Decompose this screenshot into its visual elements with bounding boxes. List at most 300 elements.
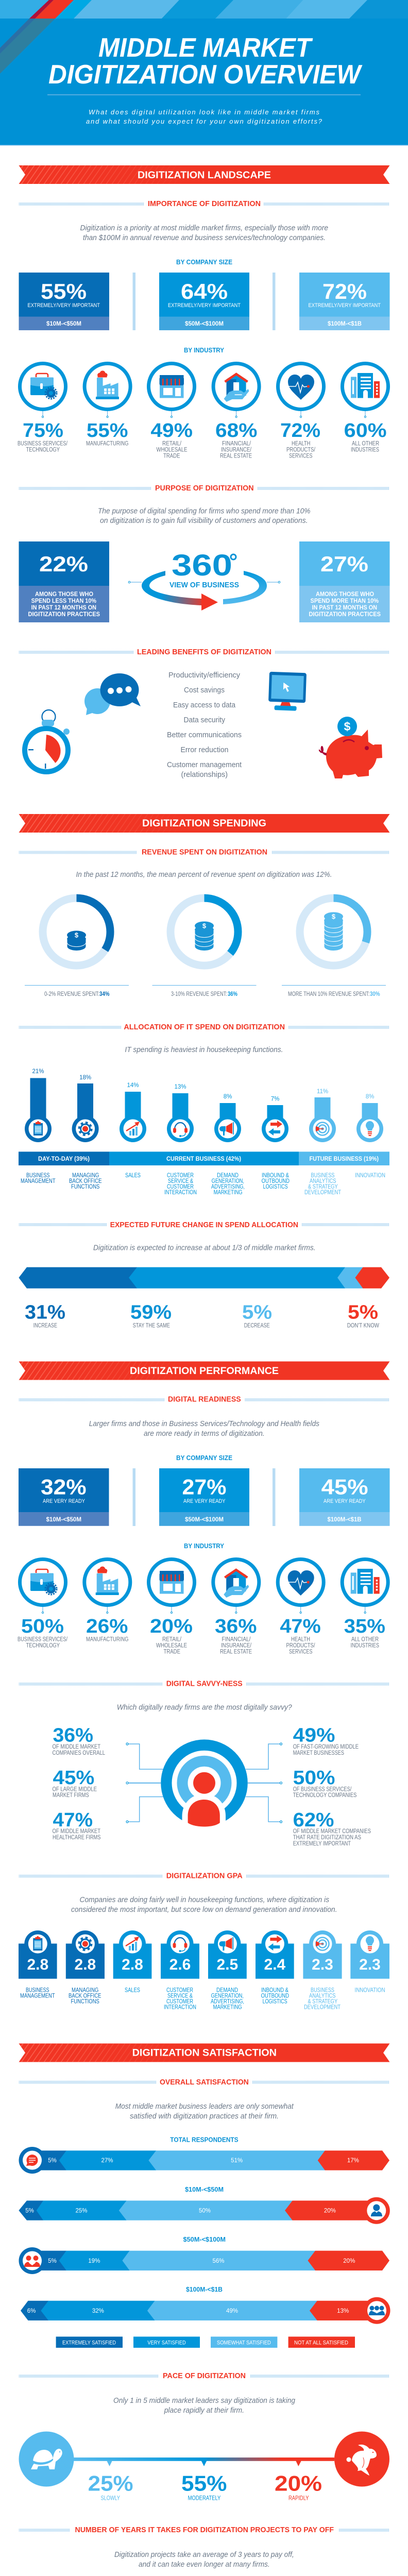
category labels: SALES (125, 1173, 141, 1179)
subheading: overall satisfaction (19, 2078, 389, 2087)
banner: digitization satisfaction: DIGITIZATION SATISFACTION (132, 2048, 277, 2059)
stats: readiness by industry: TECHNOLOGY (26, 1642, 60, 1649)
diagram: 360 degree view of business (128, 549, 280, 611)
subheading: digital savvy-ness: DIGITAL SAVVY-NESS (166, 1680, 243, 1688)
chevron bar: future change (19, 1267, 389, 1289)
banner: digitization spending (19, 814, 389, 833)
stats: readiness by industry: RETAIL/ (162, 1636, 182, 1642)
stats: readiness by industry: 20% (150, 1616, 193, 1637)
captions: revenue spent: 3-10% REVENUE SPENT: (171, 991, 227, 997)
paragraph: GPA (71, 1895, 337, 1914)
donut chart: 3-10% (171, 898, 238, 965)
GPA labels: ANALYTICS (309, 1993, 336, 1999)
category labels: LOGISTICS (263, 1184, 288, 1190)
stats: savvy right: OF FAST-GROWING MIDDLE (293, 1744, 359, 1750)
chart: $100M-<$1B: 32% (92, 2308, 104, 2314)
stats: importance by industry: INSURANCE/ (221, 447, 252, 453)
stats: savvy right: EXTREMELY IMPORTANT (293, 1841, 351, 1847)
stats: future change: STAY THE SAME (133, 1323, 170, 1329)
subtitle: What does digital utilization look like in middle market firms (89, 108, 320, 116)
stats: readiness by industry: ALL OTHER (351, 1636, 379, 1642)
subheading: revenue spent (19, 848, 389, 857)
chart: total respondents: 17% (347, 2158, 359, 2164)
GPA labels: OUTBOUND (261, 1993, 289, 1999)
stats: importance by industry: MANUFACTURING (86, 441, 129, 447)
paragraph: GPA: Companies are doing fairly well in housekeeping functions, where digitization is (79, 1895, 329, 1904)
cards: GPA scores: 2.8 (75, 1956, 96, 1973)
captions: revenue spent: 34% (99, 991, 110, 997)
GPA labels: DEMAND (216, 1987, 238, 1993)
subheading: pace of digitization (19, 2371, 389, 2380)
captions: revenue spent (25, 985, 386, 997)
paragraph: pace: Only 1 in 5 middle market leaders say digitization is taking (113, 2396, 296, 2405)
category labels: MANAGEMENT (21, 1178, 56, 1184)
cards: GPA scores: 2.3 (359, 1956, 381, 1973)
category strip (19, 1151, 389, 1165)
paragraph: purpose: on digitization is to gain full visibility of customers and operations. (100, 516, 308, 525)
stats: savvy left: OF LARGE MIDDLE (53, 1786, 97, 1792)
stats: readiness by industry: FINANCIAL/ (222, 1636, 251, 1642)
subtitle (86, 108, 322, 125)
legend: satisfaction: SOMEWHAT SATISFIED (217, 2340, 271, 2346)
stats: savvy left: 47% (53, 1809, 93, 1831)
banner: digitization performance (19, 1361, 389, 1380)
subheading: digitalization GPA: DIGITALIZATION GPA (166, 1872, 243, 1880)
GPA labels: MANAGEMENT (20, 1993, 55, 1999)
title: MIDDLE MARKET (98, 33, 313, 63)
cards: readiness by company size (19, 1468, 389, 1526)
paragraph: importance (80, 224, 328, 242)
cards: readiness by company size: $50M-<$100M (185, 1516, 224, 1523)
captions: revenue spent: MORE THAN 10% REVENUE SPENT: (288, 991, 370, 997)
captions: revenue spent: 30% (370, 991, 380, 997)
subheading: digital readiness: DIGITAL READINESS (168, 1395, 241, 1404)
paragraph: pace: place rapidly at their firm. (164, 2406, 244, 2415)
subheading: importance of digitization (19, 199, 389, 208)
GPA labels: BUSINESS (26, 1987, 49, 1993)
GPA labels: DEVELOPMENT (304, 2004, 341, 2010)
subtitle: and what should you expect for your own digitization efforts? (86, 117, 322, 125)
chart: $100M-<$1B: 13% (337, 2308, 349, 2314)
category labels: SERVICE & (168, 1178, 193, 1184)
subheading: expected future change (19, 1221, 389, 1229)
stats: importance by industry: TECHNOLOGY (26, 447, 60, 453)
stats: savvy right: THAT RATE DIGITIZATION AS (293, 1835, 361, 1841)
paragraph: revenue: In the past 12 months, the mean percent of revenue spent on digitization was 12%. (76, 870, 332, 879)
card: 27%: AMONG THOSE WHO (316, 590, 374, 598)
stats: savvy left: MARKET FIRMS (53, 1792, 89, 1799)
category strip: DAY-TO-DAY (39%) (38, 1155, 90, 1162)
icons: readiness by industry (20, 1559, 388, 1614)
stats: importance by industry: 68% (215, 420, 258, 442)
stats: readiness by industry: INSURANCE/ (221, 1642, 252, 1649)
stats: pace: RAPIDLY (288, 2496, 309, 2502)
icon: piggy bank: $ (344, 720, 351, 733)
stats: savvy left: OF MIDDLE MARKET (53, 1744, 100, 1750)
stats: pace: 25% (88, 2471, 133, 2496)
category labels: FUNCTIONS (71, 1184, 100, 1190)
list: benefits: Easy access to data (173, 701, 236, 709)
category labels: BACK OFFICE (69, 1178, 102, 1184)
stats: importance by industry: BUSINESS SERVICES/ (18, 441, 68, 447)
chart: $50M-<$100M: 56% (212, 2258, 225, 2264)
list: benefits: Data security (183, 716, 225, 724)
list: benefits: Better communications (167, 731, 242, 739)
heading: by company size: BY COMPANY SIZE (176, 1454, 232, 1462)
chart: $10M-<$50M: 5% (25, 2208, 34, 2214)
card: 27%: SPEND MORE THAN 10% (310, 597, 379, 604)
stats: importance by industry (18, 420, 386, 460)
stats: savvy right: 62% (293, 1809, 334, 1831)
donut chart: 0-2%: $ (75, 931, 79, 939)
captions: revenue spent: 36% (228, 991, 237, 997)
chart: $10M-<$50M: 25% (75, 2208, 88, 2214)
stats: readiness by industry: MANUFACTURING (86, 1636, 129, 1642)
pace gauge line (74, 2458, 334, 2466)
list: benefits (167, 671, 242, 779)
bar chart: allocation of IT spend: 13% (174, 1084, 186, 1090)
list: benefits: Customer management (167, 760, 242, 769)
chart: $100M-<$1B: 6% (27, 2308, 36, 2314)
donut chart: 0-2% (43, 898, 110, 965)
stats: future change (25, 1302, 379, 1329)
category labels: BUSINESS (311, 1173, 335, 1179)
stats: future change: 5% (348, 1302, 378, 1324)
subheading: purpose of digitization: PURPOSE OF DIGITIZATION (155, 484, 253, 493)
cards: importance by company size: $100M-<$1B (328, 320, 362, 327)
paragraph: savvy: Which digitally ready firms are the most digitally savvy? (117, 1703, 292, 1712)
paragraph: GPA: considered the most important, but score low on demand generation and innovation. (71, 1905, 337, 1914)
card: 27%: IN PAST 12 MONTHS ON (312, 604, 377, 611)
chart: $50M-<$100M (19, 2236, 389, 2274)
chart: $10M-<$50M: $10M-<$50M (185, 2186, 224, 2193)
cards: importance by company size: EXTREMELY/VERY IMPORTANT (28, 302, 100, 309)
stats: readiness by industry: 50% (21, 1616, 64, 1637)
category labels: OUTBOUND (262, 1178, 290, 1184)
stats: savvy left: COMPANIES OVERALL (53, 1750, 105, 1756)
stats: readiness by industry: 35% (344, 1616, 385, 1637)
donut chart: 3-10%: $ (202, 922, 207, 929)
cards: readiness by company size: 45% (321, 1475, 368, 1499)
cards: readiness by company size: $100M-<$1B (328, 1516, 362, 1523)
GPA labels: BACK OFFICE (69, 1993, 101, 1999)
GPA labels: ADVERTISING, (211, 1998, 244, 2005)
stats: savvy right (293, 1725, 371, 1847)
stats: pace: 55% (181, 2471, 227, 2496)
diagram: 360 degree view of business: 360 (172, 549, 232, 582)
GPA labels: SERVICE & (167, 1993, 193, 1999)
subheading: leading benefits: LEADING BENEFITS OF DIGITIZATION (137, 648, 271, 656)
category strip: CURRENT BUSINESS (42%) (166, 1155, 241, 1162)
stats: future change: DECREASE (244, 1323, 270, 1329)
stats: savvy right: TECHNOLOGY COMPANIES (293, 1792, 357, 1799)
category labels: INBOUND & (262, 1173, 289, 1179)
stats: readiness by industry (18, 1616, 385, 1655)
stats: future change: INCREASE (33, 1323, 57, 1329)
stats: importance by industry: PRODUCTS/ (286, 447, 316, 453)
chart: $10M-<$50M: 50% (199, 2208, 211, 2214)
paragraph: future change: Digitization is expected to increase at about 1/3 of middle market firms. (93, 1243, 316, 1252)
heading: by company size: BY COMPANY SIZE (176, 259, 232, 266)
stats: importance by industry: RETAIL/ (162, 441, 182, 447)
GPA labels: INBOUND & (261, 1987, 288, 1993)
paragraph: years: and it can take even longer at many firms. (139, 2560, 270, 2569)
list: benefits: Cost savings (184, 686, 225, 694)
list: benefits: (relationships) (181, 770, 228, 779)
card: 22%: DIGITIZATION PRACTICES (28, 611, 100, 618)
subheading: overall satisfaction: OVERALL SATISFACTION (160, 2078, 249, 2087)
bar chart: allocation of IT spend: 21% (32, 1069, 44, 1075)
chart: total respondents: 51% (231, 2158, 243, 2164)
cards: importance by company size: $50M-<$100M (185, 320, 224, 327)
stats: readiness by industry: 47% (280, 1616, 321, 1637)
category labels: INNOVATION (355, 1173, 385, 1179)
paragraph: purpose: The purpose of digital spending for firms who spend more than 10% (98, 506, 310, 515)
stats: importance by industry: 75% (23, 420, 63, 442)
cards: GPA scores: 2.5 (217, 1956, 238, 1973)
cards: GPA scores (19, 1930, 389, 1979)
GPA labels: MANAGING (72, 1987, 98, 1993)
subheading: digital savvy-ness (19, 1680, 389, 1688)
legend: satisfaction: VERY SATISFIED (147, 2340, 186, 2346)
icon: chat bubbles (84, 673, 141, 715)
subheading: number of years: NUMBER OF YEARS IT TAKES FOR DIGITIZATION PROJECTS TO PAY OFF (75, 2526, 334, 2534)
paragraph: readiness: are more ready in terms of digitization. (144, 1429, 265, 1438)
subheading: revenue spent: REVENUE SPENT ON DIGITIZATION (142, 848, 267, 857)
category labels: CUSTOMER (167, 1173, 194, 1179)
stats: future change: 59% (130, 1302, 172, 1324)
legend: satisfaction: NOT AT ALL SATISFIED (294, 2340, 348, 2346)
cards: GPA scores: 2.3 (312, 1956, 333, 1973)
chart: total respondents: 27% (101, 2158, 113, 2164)
cards: importance by company size: EXTREMELY/VERY IMPORTANT (308, 302, 381, 309)
subheading: expected future change: EXPECTED FUTURE CHANGE IN SPEND ALLOCATION (110, 1221, 298, 1229)
stats: readiness by industry: INDUSTRIES (350, 1642, 379, 1649)
GPA labels: BUSINESS (311, 1987, 334, 1993)
category labels: DEMAND (217, 1173, 239, 1179)
subheading: allocation of IT spend (19, 1023, 389, 1031)
stats: readiness by industry: TRADE (164, 1649, 180, 1655)
stats: future change: 31% (25, 1302, 65, 1324)
cards: readiness by company size: $10M-<$50M (46, 1516, 81, 1523)
chart: total respondents: TOTAL RESPONDENTS (170, 2136, 239, 2143)
stats: readiness by industry: 36% (215, 1616, 257, 1637)
cards: importance by company size: 64% (181, 279, 228, 303)
bar chart: allocation of IT spend (25, 1069, 383, 1142)
stats: readiness by industry: BUSINESS SERVICES/ (18, 1636, 68, 1642)
category labels: INTERACTION (164, 1190, 197, 1196)
stats: readiness by industry: WHOLESALE (156, 1642, 187, 1649)
cards: importance by company size: $10M-<$50M (46, 320, 81, 327)
card: 27%: 27% (320, 552, 368, 576)
stats: savvy left (53, 1725, 105, 1841)
list: benefits: Error reduction (180, 745, 229, 754)
cards: readiness by company size: ARE VERY READY (324, 1498, 366, 1504)
cards: readiness by company size: ARE VERY READY (183, 1498, 226, 1504)
stats: future change: DON'T KNOW (347, 1323, 379, 1329)
icon: turtle (19, 2432, 74, 2486)
stats: importance by industry: INDUSTRIES (351, 447, 379, 453)
category labels: MARKETING (214, 1190, 243, 1196)
subheading: pace of digitization: PACE OF DIGITIZATION (163, 2371, 246, 2380)
subheading: leading benefits (19, 648, 389, 656)
GPA labels: FUNCTIONS (71, 1998, 99, 2005)
title: DIGITIZATION OVERVIEW (48, 60, 363, 90)
stats: savvy left: HEALTHCARE FIRMS (53, 1835, 101, 1841)
stats: importance by industry: TRADE (163, 453, 180, 460)
title (48, 33, 363, 90)
bar chart: allocation of IT spend: 14% (127, 1082, 139, 1089)
donut chart: more than 10% (300, 898, 367, 965)
icons: importance by industry (20, 364, 388, 418)
GPA labels: INTERACTION (164, 2004, 196, 2010)
cards: importance by company size: 55% (41, 279, 87, 303)
card: 22%: AMONG THOSE WHO (35, 590, 93, 598)
heading: by industry: BY INDUSTRY (184, 347, 225, 354)
stats: savvy left: 36% (53, 1725, 93, 1747)
stats: savvy left: 45% (53, 1767, 94, 1789)
banner: digitization landscape: DIGITIZATION LANDSCAPE (138, 170, 271, 181)
paragraph: pace (113, 2396, 296, 2415)
stats: pace: MODERATELY (188, 2496, 221, 2502)
GPA labels: LOGISTICS (263, 1998, 287, 2005)
header band (0, 0, 408, 145)
cards: readiness by company size: ARE VERY READY (43, 1498, 86, 1504)
stats: savvy right: OF BUSINESS SERVICES/ (293, 1786, 352, 1792)
icon: rabbit (334, 2432, 389, 2486)
GPA labels (20, 1987, 385, 2010)
cards: readiness by company size: 32% (41, 1475, 87, 1499)
category labels: & STRATEGY (308, 1184, 338, 1190)
cards: importance by company size: 72% (322, 279, 367, 303)
chart: total respondents (19, 2136, 389, 2174)
GPA labels: INNOVATION (354, 1987, 385, 1993)
chart: $50M-<$100M: $50M-<$100M (183, 2236, 226, 2243)
chart: $100M-<$1B: 49% (226, 2308, 238, 2314)
stats: readiness by industry: PRODUCTS/ (286, 1642, 315, 1649)
icon: stopwatch (25, 710, 70, 772)
category labels: GENERATION, (212, 1178, 244, 1184)
diagram: target person (126, 1739, 282, 1829)
paragraph: satisfaction (115, 2102, 294, 2121)
category labels (21, 1173, 385, 1196)
stats: importance by industry: HEALTH (292, 441, 310, 447)
cards: GPA scores: 2.8 (122, 1956, 143, 1973)
banner: digitization performance: DIGITIZATION PERFORMANCE (130, 1366, 279, 1377)
chart: $50M-<$100M: 19% (88, 2258, 100, 2264)
stats: pace (88, 2471, 322, 2502)
legend: satisfaction: EXTREMELY SATISFIED (62, 2340, 116, 2346)
legend: satisfaction (56, 2336, 355, 2348)
paragraph: satisfaction: Most middle market business leaders are only somewhat (115, 2102, 294, 2111)
cards: importance by company size: EXTREMELY/VERY IMPORTANT (168, 302, 241, 309)
stats: importance by industry: 60% (344, 420, 386, 442)
bar chart: allocation of IT spend: 11% (317, 1089, 328, 1095)
chart: $50M-<$100M: 5% (48, 2258, 57, 2264)
subheading: allocation of IT spend: ALLOCATION OF IT SPEND ON DIGITIZATION (124, 1023, 285, 1031)
paragraph: years: Digitization projects take an average of 3 years to pay off, (114, 2550, 294, 2559)
stats: importance by industry: REAL ESTATE (220, 453, 252, 460)
paragraph: readiness: Larger firms and those in Business Services/Technology and Health fields (89, 1419, 319, 1428)
cards: GPA scores: 2.4 (264, 1956, 286, 1973)
bar chart: allocation of IT spend: 8% (224, 1094, 232, 1100)
stats: importance by industry: 49% (150, 420, 193, 442)
stats: importance by industry: ALL OTHER (352, 441, 379, 447)
subheading: digital readiness (19, 1395, 389, 1404)
GPA labels: CUSTOMER (166, 1998, 193, 2005)
paragraph: readiness (89, 1419, 319, 1438)
icon: piggy bank (319, 717, 382, 778)
stats: importance by industry: WHOLESALE (157, 447, 188, 453)
stats: importance by industry: 72% (280, 420, 320, 442)
stats: pace: 20% (275, 2471, 322, 2496)
card: 22%: SPEND LESS THAN 10% (31, 597, 96, 604)
cards: importance by company size (19, 273, 389, 330)
diagram: 360 degree view of business: VIEW OF BUSINESS (169, 581, 239, 589)
card: 22%: 22% (39, 552, 88, 576)
chart: $100M-<$1B (21, 2286, 390, 2324)
subheading: digitalization GPA (19, 1872, 389, 1880)
icon: computer monitor (268, 672, 307, 711)
paragraph: years (114, 2550, 294, 2569)
donut chart: more than 10%: $ (332, 913, 336, 920)
stats: readiness by industry: 26% (86, 1616, 128, 1637)
GPA labels: MARKETING (213, 2004, 242, 2010)
stats: readiness by industry: REAL ESTATE (220, 1649, 252, 1655)
GPA labels: SALES (125, 1987, 140, 1993)
stats: pace: SLOWLY (101, 2496, 120, 2502)
category labels: DEVELOPMENT (304, 1190, 341, 1196)
GPA labels: & STRATEGY (308, 1998, 337, 2005)
category labels: CUSTOMER (167, 1184, 194, 1190)
paragraph: importance: than $100M in annual revenue and business services/technology companies. (83, 233, 326, 242)
GPA labels: GENERATION, (211, 1993, 244, 1999)
chart: $10M-<$50M: 20% (324, 2208, 336, 2214)
chart: $10M-<$50M (19, 2186, 390, 2224)
category strip: FUTURE BUSINESS (19%) (309, 1155, 379, 1162)
stats: savvy right: 49% (293, 1725, 335, 1747)
stats: importance by industry: SERVICES (289, 453, 313, 460)
cards: GPA scores: 2.6 (169, 1956, 191, 1973)
paragraph: allocation: IT spending is heaviest in housekeeping functions. (125, 1045, 283, 1054)
paragraph: satisfaction: satisfied with digitization practices at their firm. (130, 2112, 279, 2121)
stats: importance by industry: 55% (87, 420, 128, 442)
subheading: purpose of digitization (19, 484, 389, 493)
paragraph: purpose (98, 506, 310, 525)
stats: readiness by industry: HEALTH (291, 1636, 310, 1642)
heading: by industry: BY INDUSTRY (184, 1543, 225, 1550)
stats: savvy left: OF MIDDLE MARKET (53, 1828, 100, 1835)
chart: total respondents: 5% (48, 2158, 57, 2164)
card: 27% (299, 541, 389, 622)
banner: digitization spending: DIGITIZATION SPENDING (142, 818, 266, 829)
banner: digitization satisfaction (19, 2043, 389, 2062)
GPA labels: CUSTOMER (166, 1987, 193, 1993)
stats: readiness by industry: SERVICES (289, 1649, 313, 1655)
category labels: ADVERTISING, (211, 1184, 245, 1190)
chart: $100M-<$1B: $100M-<$1B (186, 2286, 223, 2293)
chart: $50M-<$100M: 20% (343, 2258, 355, 2264)
category labels: ANALYTICS (310, 1178, 336, 1184)
card: 22% (19, 541, 109, 622)
subheading: importance of digitization: IMPORTANCE OF DIGITIZATION (148, 199, 261, 208)
stats: future change: 5% (242, 1302, 272, 1324)
banner: digitization landscape (19, 165, 389, 184)
category labels: BUSINESS (26, 1173, 50, 1179)
cards: readiness by company size: 27% (182, 1475, 226, 1499)
stats: savvy right: 50% (293, 1767, 335, 1789)
bar chart: allocation of IT spend: 7% (271, 1096, 279, 1103)
